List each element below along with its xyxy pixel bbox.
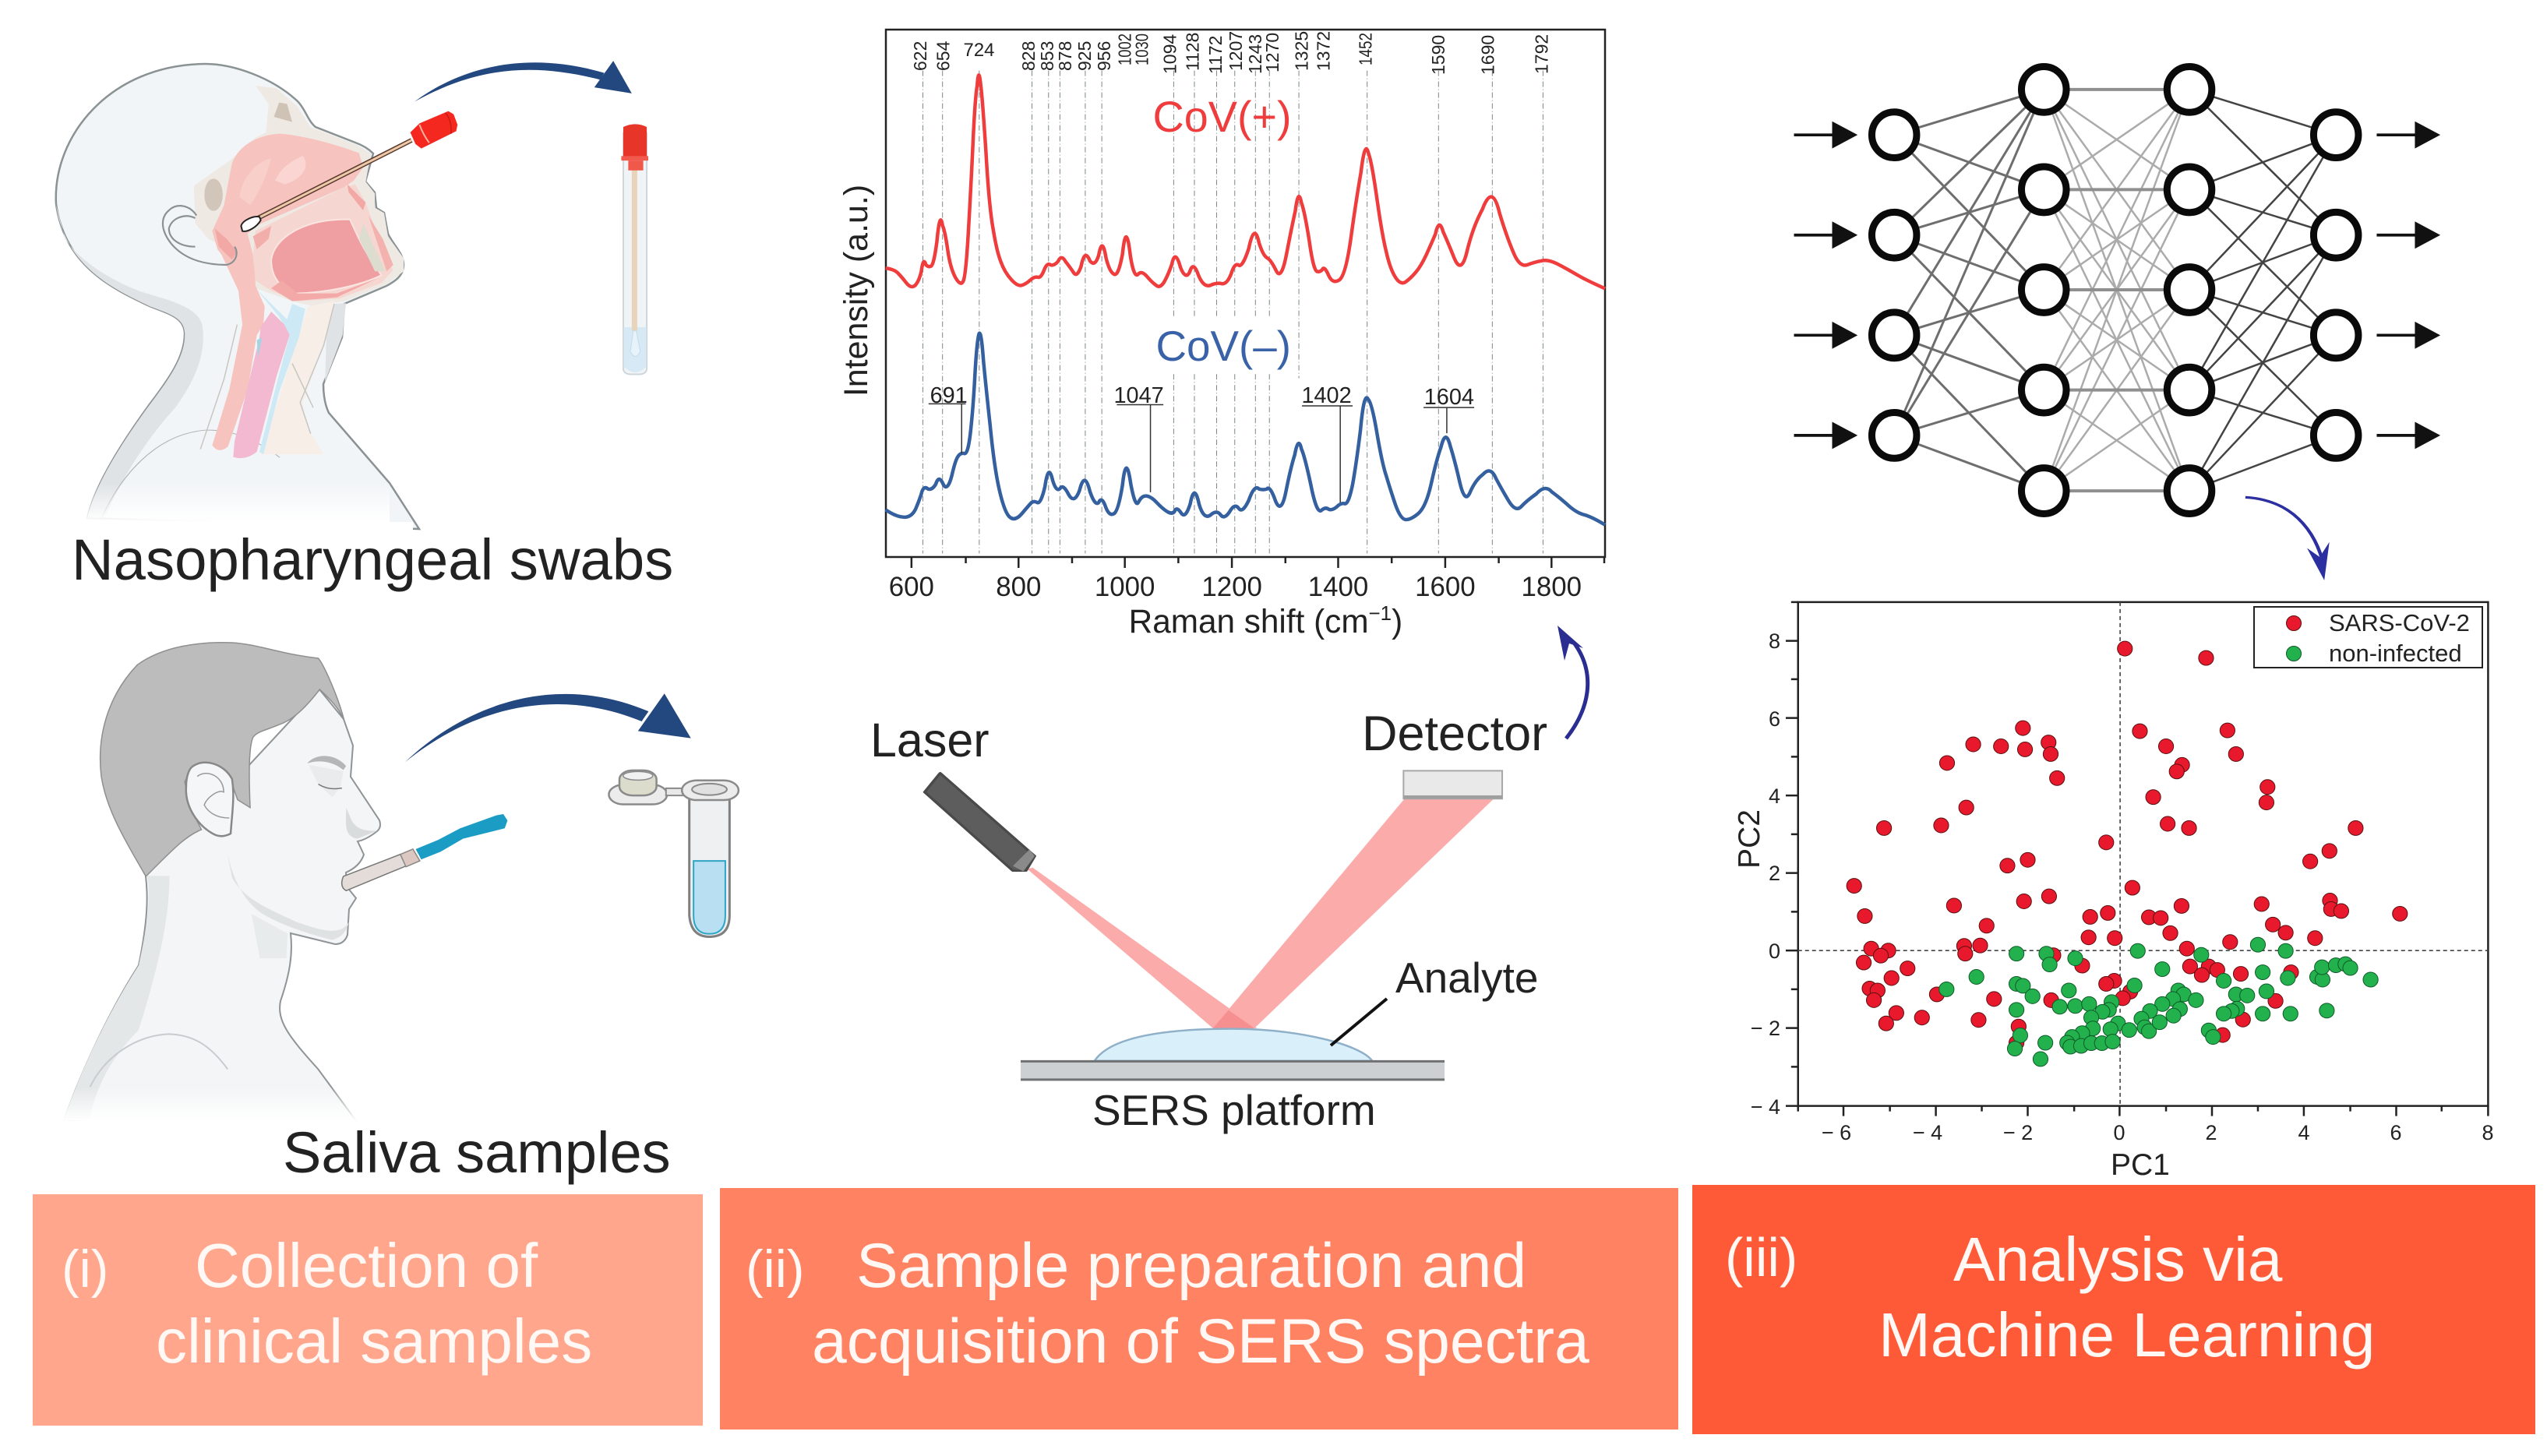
y axis tick labels: 6 [1769,707,1780,731]
x axis tick labels: 0 [2113,1121,2125,1144]
peak labels along top: 622 [910,41,930,71]
x axis tick labels: 1200 [1201,572,1262,602]
series: non-infected points [1939,937,2378,1066]
input and output arrows [1794,122,2440,449]
arrow: swab to tube [415,61,632,102]
y axis title: PC2 [1733,809,1766,869]
peak labels along top: 878 [1055,41,1075,71]
label: CoV(−): CoV(–) [1156,322,1291,370]
arrow: mouth to tube [405,693,691,762]
panel: saliva sample collection [42,643,739,1185]
banner: step i: Collection of [195,1231,538,1300]
y axis tick labels: − 4 [1751,1095,1780,1119]
x axis title: PC1 [2111,1148,2170,1182]
x axis tick labels: − 2 [2003,1121,2033,1144]
peak marker lines [922,71,1543,553]
connections hidden to output [2189,90,2336,491]
icon: detector [1403,770,1502,799]
diagram: SERS measurement setup [870,707,1547,1134]
illustration: person with saliva collector [42,643,507,1139]
peak labels along top: 1590 [1428,35,1448,75]
y axis tick labels: 2 [1769,862,1780,885]
beams [1028,799,1494,1028]
banner: step ii [720,1188,1678,1430]
plot frame and ticks [886,30,1605,568]
horizontal hidden connections [2044,90,2189,491]
y axis tick labels: 4 [1769,784,1780,808]
peak labels along top: 1325 [1292,31,1312,71]
label: Laser: Laser [870,714,990,767]
y axis tick labels [1751,629,1780,1119]
y axis tick labels: 0 [1769,940,1780,963]
banner: step i: clinical samples [156,1306,592,1376]
label: Nasopharyngeal swabs: Nasopharyngeal swabs [72,527,673,592]
panel: nasopharyngeal swab collection [39,61,673,592]
peak labels along top: 1002 [1115,33,1135,65]
peak annotations with leaders [929,383,1474,502]
x axis tick labels: 6 [2390,1121,2402,1144]
x axis title: ) [1392,603,1402,640]
peak annotations with leaders: 1604 [1424,385,1474,410]
connections input to hidden [1894,90,2044,491]
x axis tick labels: 1000 [1095,572,1155,602]
banner: step iii: (iii) [1725,1227,1797,1288]
series: CoV(−) blue spectrum [886,333,1605,525]
peak labels along top: 1207 [1226,31,1246,71]
chart: Raman spectra [838,30,1605,640]
legend: SARS-CoV-2 [2329,609,2470,636]
peak labels along top: 1270 [1262,33,1282,72]
label: Detector: Detector [1362,707,1547,761]
peak labels along top: 1030 [1132,33,1152,65]
y axis tick labels: 8 [1769,629,1780,653]
x axis title: Raman shift (cm [1129,603,1369,640]
label: Analyte: Analyte [1395,954,1538,1002]
icon: microcentrifuge tube [609,770,739,936]
banner: step ii: acquisition of SERS spectra [812,1306,1589,1377]
peak labels along top: 1690 [1478,35,1498,75]
x axis tick labels: 8 [2482,1121,2494,1144]
peak labels along top: 1792 [1531,34,1551,74]
plot frame, ticks and zero lines [1786,602,2488,1116]
banner: step ii: (ii) [746,1239,805,1299]
peak labels along top: 956 [1094,41,1114,71]
peak labels along top: 1372 [1314,31,1334,71]
x axis tick labels: 600 [889,572,934,602]
series: CoV(+) red spectrum [886,75,1605,288]
x axis tick labels: − 4 [1913,1121,1942,1144]
banner: step iii [1692,1185,2535,1434]
chart: PCA scatter plot [1733,602,2494,1182]
illustration: head cross-section with swab [39,64,457,539]
leader line to analyte [1331,999,1387,1045]
legend [2254,607,2482,668]
x axis tick labels: − 6 [1822,1121,1851,1144]
label: SERS platform: SERS platform [1092,1086,1376,1134]
peak labels along top: 654 [933,41,954,71]
x axis tick labels: 2 [2205,1121,2217,1144]
x axis title: −1 [1369,603,1392,625]
peak labels along top [910,31,1551,75]
y axis tick labels: − 2 [1751,1017,1780,1040]
icon: laser head [925,773,1035,872]
banner: step ii: Sample preparation and [856,1231,1526,1301]
x axis tick labels: 1800 [1522,572,1582,602]
label: CoV(+): CoV(+) [1153,92,1292,141]
peak labels along top: 853 [1037,41,1057,71]
x axis tick labels [1822,1121,2494,1144]
peak labels along top: 828 [1018,41,1039,71]
y axis title: Intensity (a.u.) [838,185,875,397]
peak labels along top: 724 [964,40,994,61]
x axis tick labels: 1600 [1415,572,1476,602]
legend: non-infected [2329,640,2462,667]
peak labels along top: 1172 [1205,36,1226,74]
series: SARS-CoV-2 points [1847,641,2408,1050]
x axis tick labels [889,572,1582,602]
peak labels along top: 925 [1074,41,1095,71]
peak labels along top: 1094 [1159,34,1180,74]
banner: step i: (i) [62,1239,108,1299]
diagram: neural network [1794,66,2440,513]
analyte droplet [1095,1029,1372,1061]
peak annotations with leaders: 1402 [1301,383,1352,408]
banner: step iii: Machine Learning [1879,1299,2375,1370]
x axis tick labels: 800 [996,572,1041,602]
arrow: SERS to spectrum [1557,626,1588,739]
banner: step iii: Analysis via [1953,1225,2283,1294]
peak annotations with leaders: 691 [930,383,968,408]
peak labels along top: 1243 [1245,34,1265,74]
label: Saliva samples: Saliva samples [283,1120,671,1185]
peak labels along top: 1452 [1355,33,1375,65]
icon: sample tube with swab [621,124,648,374]
nodes [1871,66,2358,513]
connections hidden to hidden [2044,90,2189,491]
x axis tick labels: 4 [2298,1121,2310,1144]
SERS platform bar [1021,1061,1445,1080]
x axis tick labels: 1400 [1308,572,1368,602]
peak labels along top: 1128 [1182,33,1202,71]
arrow: network to scatter plot [2245,497,2330,580]
peak annotations with leaders: 1047 [1113,383,1164,408]
banner: step i [33,1194,703,1426]
